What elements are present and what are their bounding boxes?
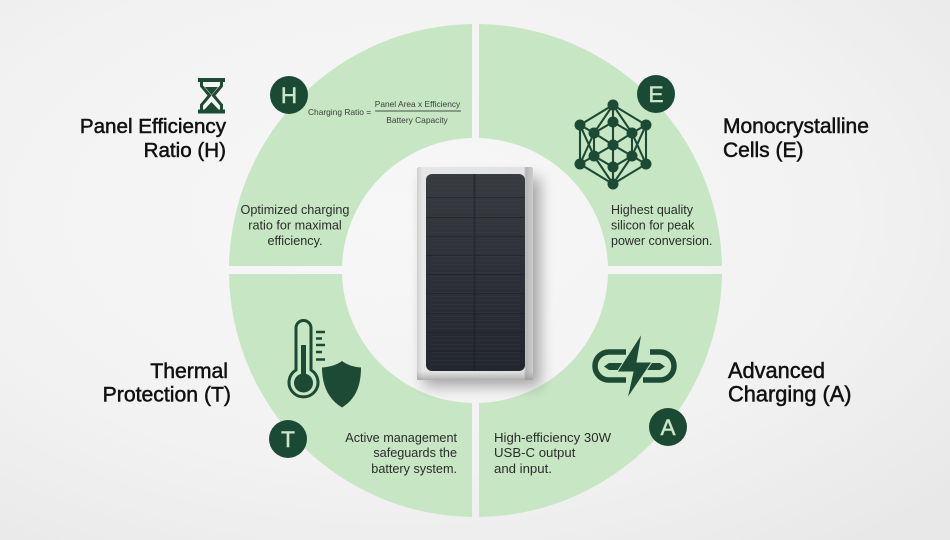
text: T description: battery system.	[371, 462, 457, 476]
badge: H: H	[281, 83, 297, 108]
heading: Thermal Protection: Protection (T)	[103, 384, 231, 406]
heading: Advanced Charging: Advanced	[728, 358, 825, 383]
badge: E: E	[648, 82, 664, 107]
icon: thermometer and shield	[289, 321, 361, 408]
icon: charging link with bolt	[595, 333, 674, 399]
heading: Monocrystalline Cells: Cells (E)	[723, 139, 804, 162]
text: T description: safeguards the	[373, 446, 457, 460]
panel: A quadrant	[479, 274, 722, 517]
text: T description: Active management	[345, 431, 457, 445]
text: H description: ratio for maximal	[248, 218, 342, 232]
text: H description: efficiency.	[267, 234, 323, 248]
text: A description: High-efficiency 30W	[494, 430, 612, 445]
badge: H	[270, 76, 308, 114]
icon: crystal lattice	[574, 100, 652, 190]
text: A description: USB-C output	[494, 445, 576, 460]
badge: A	[649, 408, 687, 446]
text: H description: Optimized charging	[241, 203, 349, 217]
badge: E	[637, 75, 675, 113]
badge: A: A	[660, 415, 676, 440]
solar panel	[426, 174, 525, 371]
heading: Panel Efficiency Ratio: Ratio (H)	[144, 139, 226, 162]
badge: T	[269, 420, 307, 458]
badge: T: T	[281, 427, 295, 452]
panel: T quadrant	[229, 274, 472, 517]
device frame	[417, 167, 533, 380]
formula: charging ratio: Charging Ratio =	[308, 107, 371, 117]
heading: Advanced Charging: Charging (A)	[728, 382, 852, 406]
text: E description: silicon for peak	[611, 218, 695, 232]
icon: hourglass	[198, 78, 225, 114]
heading: Thermal Protection: Thermal	[150, 360, 228, 383]
heading: Panel Efficiency Ratio: Panel Efficiency	[80, 115, 227, 138]
text: E description: Highest quality	[611, 203, 694, 217]
device: solar power bank	[417, 167, 540, 386]
panel: H quadrant	[229, 24, 472, 266]
text: A description: and input.	[494, 461, 552, 476]
panel: segmented ring	[229, 24, 722, 517]
formula: charging ratio: Panel Area x Efficiency	[375, 99, 461, 109]
panel: E quadrant	[479, 24, 722, 266]
text: E description: power conversion.	[611, 234, 712, 248]
formula: charging ratio: Battery Capacity	[386, 115, 449, 125]
heading: Monocrystalline Cells: Monocrystalline	[723, 115, 869, 138]
formula: charging ratio	[308, 99, 461, 125]
